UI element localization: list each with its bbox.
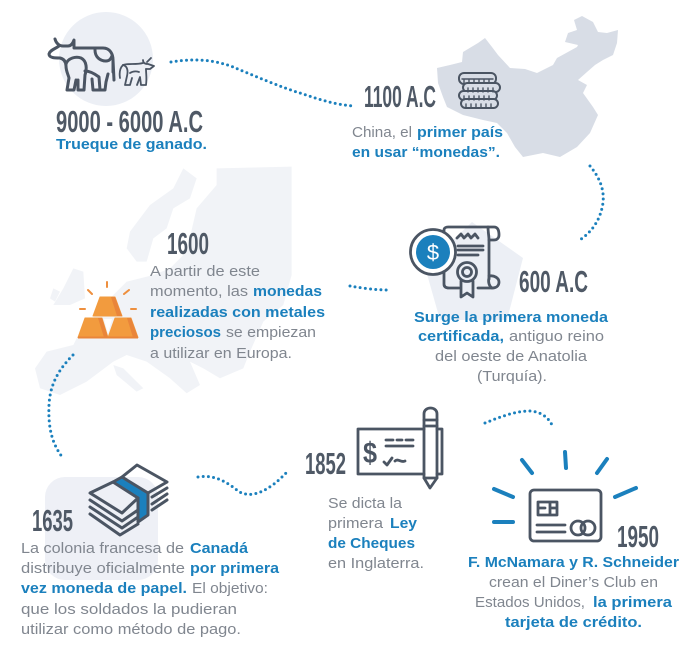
background map: Europe (35, 167, 292, 395)
dotted connector: credit card (485, 411, 553, 427)
text: Canada description: Canadá (190, 540, 249, 557)
text: Anatolia description: (Turquía). (477, 368, 547, 385)
text: Canada description: distribuye oficialmente (21, 560, 185, 577)
heading: 1600: 1600 (167, 226, 209, 261)
panel: 1852 (305, 408, 442, 572)
icon: certificate: $ (427, 240, 439, 265)
text: cheque law description: en Inglaterra. (328, 555, 424, 572)
text: cheque law description (328, 495, 424, 572)
icon background (45, 477, 158, 580)
text: Europe description: a utilizar en Europa. (150, 345, 292, 362)
text: Anatolia description: Surge la primera moneda (414, 309, 609, 326)
heading: 9000 - 6000 A.C: 9000 - 6000 A.C (56, 104, 203, 139)
icon: credit card (494, 452, 636, 541)
text: credit card description: Estados Unidos, (475, 594, 585, 611)
text: Canada description: por primera (190, 560, 280, 577)
text: Anatolia description: antiguo reino (509, 328, 604, 345)
text: China description (352, 124, 503, 161)
dotted connector: Canada to cheques (198, 472, 287, 494)
panel: 9000-6000 A.C (49, 12, 207, 153)
text: Canada description: La colonia francesa de (21, 540, 184, 557)
icon: cattle (49, 12, 154, 106)
text: Europe description (150, 263, 325, 362)
text: Europe description: A partir de este (150, 263, 260, 280)
panel: 600 A.C (410, 222, 609, 385)
text: credit card description (468, 554, 679, 631)
text: Europe description: realizadas con metales (150, 304, 325, 321)
panel: 1600 (78, 226, 325, 362)
dotted connector: China to Anatolia (578, 166, 603, 241)
text: credit card description: F. McNamara y R. Schneider (468, 554, 679, 571)
text: China description: en usar “monedas”. (352, 144, 500, 161)
text: cheque law description: de Cheques (328, 535, 415, 552)
dotted connector: cattle to China (171, 60, 355, 106)
background map: China (437, 16, 618, 157)
panel: 1950 (468, 452, 679, 631)
text: Canada description: que los soldados la pudieran (21, 601, 237, 618)
text: cheque law description: primera (328, 515, 384, 532)
heading: 1100 A.C: 1100 A.C (364, 79, 436, 114)
heading: 600 A.C: 600 A.C (519, 264, 588, 299)
text: Anatolia description: del oeste de Anatolia (435, 348, 588, 365)
text: Canada description: El objetivo: (192, 580, 268, 597)
text: credit card description: crean el Diner’s Club en (489, 574, 658, 591)
text: China description: China, el (352, 124, 412, 141)
dotted connector: Anatolia to Europe (350, 286, 389, 290)
text: cheque law description: Ley (390, 515, 418, 532)
text: Anatolia description (414, 309, 609, 385)
text: Canada description: utilizar como método de pago. (21, 621, 241, 638)
text: Trueque de ganado: Trueque de ganado. (56, 136, 207, 153)
panel: 1635 (21, 465, 280, 638)
icon: cheque and pen: $ (363, 437, 377, 470)
text: credit card description: la primera (593, 594, 673, 611)
icon: cheque and pen (358, 408, 442, 488)
text: cheque law description: Se dicta la (328, 495, 403, 512)
text: Europe description: preciosos (150, 324, 221, 341)
icon: banknotes (90, 465, 167, 535)
heading: 1852: 1852 (305, 446, 346, 481)
text: Canada description: vez moneda de papel. (21, 580, 187, 597)
text: Europe description: se empiezan (226, 324, 316, 341)
heading: 1635: 1635 (32, 503, 73, 538)
icon: certificate (410, 222, 523, 320)
panel: 1100 A.C (352, 73, 503, 161)
text: Canada description (21, 540, 280, 638)
text: credit card description: tarjeta de crédito. (505, 614, 642, 631)
text: China description: primer país (417, 124, 503, 141)
heading: 1950: 1950 (617, 519, 659, 554)
text: Europe description: momento, las (150, 283, 248, 300)
text: Europe description: monedas (253, 283, 322, 300)
text: Anatolia description: certificada, (418, 328, 504, 345)
dotted connector: Europe to Canada (49, 355, 73, 458)
icon: gold bars (78, 282, 138, 338)
icon: coin stack (459, 73, 500, 108)
